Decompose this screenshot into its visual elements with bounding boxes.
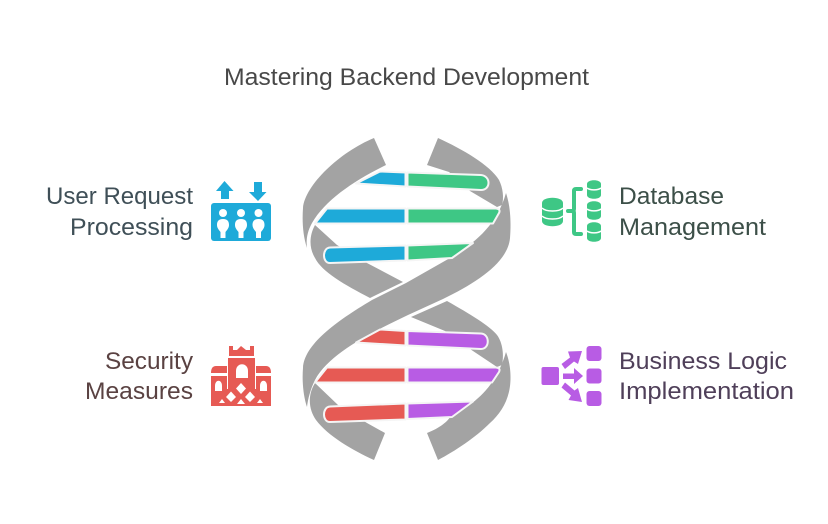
helix strand: lower crossing <box>411 301 503 367</box>
bars: blue <box>315 172 406 263</box>
icon: security castle <box>211 346 271 406</box>
DNA helix graphic <box>303 138 511 460</box>
label: Business Logic Implementation: Implementation <box>619 378 794 405</box>
label: User Request Processing: Processing <box>70 214 193 241</box>
title: Mastering Backend Development <box>224 64 589 91</box>
bars: red <box>315 330 406 422</box>
helix strand: top right <box>427 138 503 207</box>
helix strand: bottom right <box>427 352 511 460</box>
label: Security Measures <box>85 348 193 405</box>
helix strand: bottom left <box>310 383 385 460</box>
helix strand: main diagonal <box>303 193 511 407</box>
label: Security Measures: Measures <box>85 378 193 405</box>
label: Business Logic Implementation: Business Logic <box>619 348 787 375</box>
label: Business Logic Implementation <box>619 348 794 405</box>
bars: green <box>408 172 500 260</box>
icon: business logic <box>542 346 602 406</box>
bars: purple <box>408 331 500 419</box>
helix strand: top left crossing behind <box>303 138 403 298</box>
label: Database Management: Management <box>619 214 766 241</box>
label: User Request Processing <box>46 183 193 241</box>
icon: database management <box>542 180 601 242</box>
label: Database Management: Database <box>619 183 724 210</box>
icon: user request processing <box>211 181 271 241</box>
label: Database Management <box>619 183 766 241</box>
label: Security Measures: Security <box>105 348 193 375</box>
label: User Request Processing: User Request <box>46 183 193 210</box>
